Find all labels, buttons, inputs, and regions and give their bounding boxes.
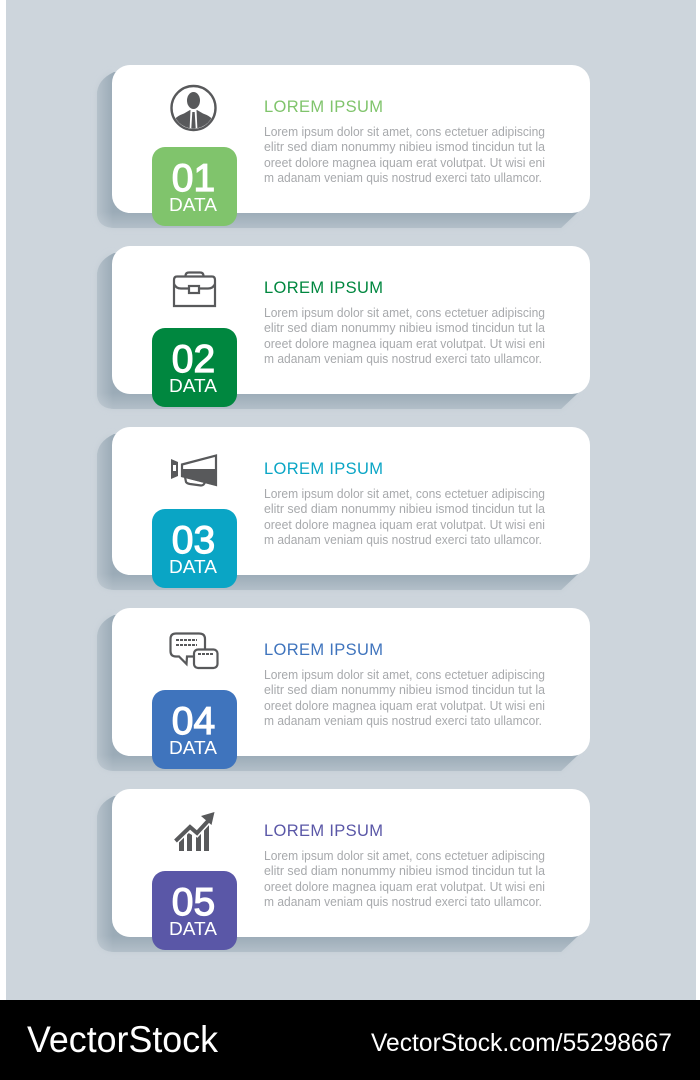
heading 4: LOREM IPSUM [264,641,383,659]
heading 3: LOREM IPSUM [264,460,383,478]
body text 3: Lorem ipsum dolor sit amet, cons ectetuer adipiscing [264,486,545,501]
body text 1: m adanam veniam quis nostrud exerci tato ullamcor. [264,170,542,185]
badge 03: DATA [169,557,217,577]
body text 5 [264,848,546,909]
footer bar [0,1000,700,1080]
card 4 panel [112,608,590,756]
card 5 shadow [97,796,578,952]
body text 3: elitr sed diam nonummy nibieu ismod tincidun tut la [264,501,546,516]
card 3 [90,427,590,597]
card 3 panel [112,427,590,575]
body text 5: oreet dolore magnea iquam erat volutpat. Ut wisi eni [264,879,545,894]
badge 02: 02 [172,338,215,381]
icon: chat bubbles [170,634,218,668]
badge 05: DATA [169,919,217,939]
badge 03 [152,509,237,588]
card 3 shadow [97,434,578,590]
icon: growth chart [176,812,214,851]
badge 02: DATA [169,376,217,396]
body text 2: elitr sed diam nonummy nibieu ismod tincidun tut la [264,320,546,335]
card 2 panel [112,246,590,394]
heading 2: LOREM IPSUM [264,279,383,297]
card 1 shadow [97,72,578,228]
body text 1 [264,124,546,185]
footer logo: VectorStock [27,1019,218,1060]
card 2 shadow [97,253,578,409]
body text 4: m adanam veniam quis nostrud exerci tato ullamcor. [264,713,542,728]
badge 01: 01 [172,157,215,200]
icon: megaphone [171,456,217,486]
card 1 [90,65,590,235]
body text 3: m adanam veniam quis nostrud exerci tato ullamcor. [264,532,542,547]
icon: briefcase [174,272,215,306]
body text 2 [264,305,546,366]
badge 01: DATA [169,195,217,215]
body text 3 [264,486,546,547]
body text 2: m adanam veniam quis nostrud exerci tato ullamcor. [264,351,542,366]
badge 02 [152,328,237,407]
card 4 [90,608,590,778]
body text 5: Lorem ipsum dolor sit amet, cons ectetuer adipiscing [264,848,545,863]
badge 04: 04 [172,700,215,743]
badge 04: DATA [169,738,217,758]
heading 1: LOREM IPSUM [264,98,383,116]
card 1 panel [112,65,590,213]
heading 5: LOREM IPSUM [264,822,383,840]
body text 1: oreet dolore magnea iquam erat volutpat. Ut wisi eni [264,155,545,170]
body text 3: oreet dolore magnea iquam erat volutpat. Ut wisi eni [264,517,545,532]
badge 03: 03 [172,519,215,562]
body text 1: Lorem ipsum dolor sit amet, cons ectetuer adipiscing [264,124,545,139]
body text 4: Lorem ipsum dolor sit amet, cons ectetuer adipiscing [264,667,545,682]
badge 05: 05 [172,881,215,924]
card 5 [90,789,590,959]
badge 01 [152,147,237,226]
body text 4 [264,667,546,728]
body text 1: elitr sed diam nonummy nibieu ismod tincidun tut la [264,139,546,154]
card 5 panel [112,789,590,937]
body text 2: oreet dolore magnea iquam erat volutpat. Ut wisi eni [264,336,545,351]
icon: person [171,86,216,132]
footer url: VectorStock.com/55298667 [371,1029,672,1057]
body text 4: elitr sed diam nonummy nibieu ismod tincidun tut la [264,682,546,697]
card 2 [90,246,590,416]
body text 5: elitr sed diam nonummy nibieu ismod tincidun tut la [264,863,546,878]
body text 4: oreet dolore magnea iquam erat volutpat. Ut wisi eni [264,698,545,713]
body text 2: Lorem ipsum dolor sit amet, cons ectetuer adipiscing [264,305,545,320]
badge 04 [152,690,237,769]
badge 05 [152,871,237,950]
card 4 shadow [97,615,578,771]
body text 5: m adanam veniam quis nostrud exerci tato ullamcor. [264,894,542,909]
